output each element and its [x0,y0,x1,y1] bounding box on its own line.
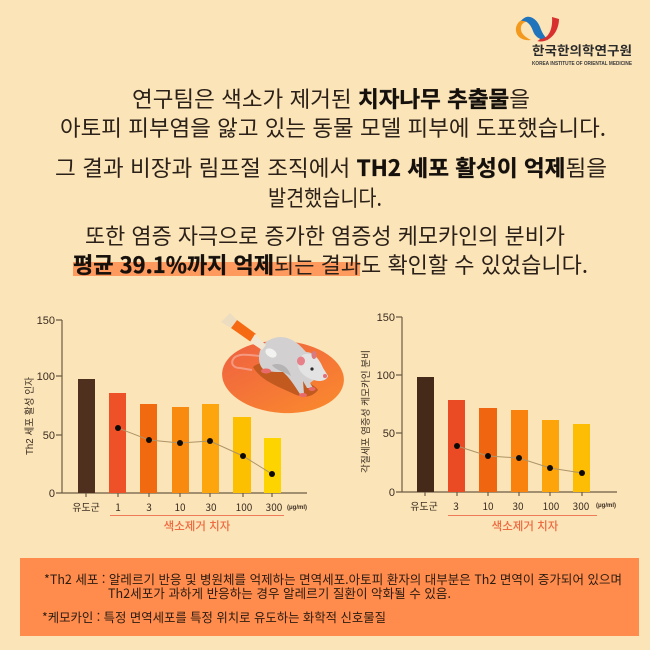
main text block: 또한 염증 자극으로 증가한 염증성 케모카인의 분비가 [85,219,565,251]
illustration: mouse with ointment on orange disc [220,313,346,417]
x axis labels: (μg/ml) [287,505,307,511]
main text block: 그 결과 비장과 림프절 조직에서 TH2 세포 활성이 억제됨을 [55,151,607,183]
x axis labels [410,498,616,513]
y axis ticks and labels: 100 [377,370,395,382]
main text block: 아토피 피부염을 앓고 있는 동물 모델 피부에 도포했습니다. [60,111,606,143]
x axis labels: 10 [174,499,186,514]
logo: Korea Institute of Oriental Medicine: 한국한의학연구원 [532,43,632,58]
footnote panel [20,558,639,636]
x axis labels: 3 [453,498,459,513]
footnote: Th2 cell: *Th2 세포 : 알레르기 반응 및 병원체를 억제하는 면역세포.아토피 환자의 대부분은 Th2 면역이 증가되어 있으며 [44,569,622,588]
bars [78,379,281,493]
main text block [55,82,607,280]
y axis ticks and labels: 0 [49,488,55,500]
footnote: chemokine: *케모카인 : 특정 면역세포를 특정 위치로 유도하는 화학적 신호물질 [42,607,386,626]
highlight behind key result [73,262,360,276]
x axis labels: 유도군 [410,498,438,513]
logo: Korea Institute of Oriental Medicine [516,17,633,67]
x axis labels [72,499,307,514]
y axis ticks and labels [37,315,307,500]
x axis labels: 10 [482,498,494,513]
main text block: 발견했습니다. [268,181,382,213]
x axis group label: 색소제거 치자 [492,518,559,534]
footnote: Th2 cell [44,569,622,602]
x axis labels: 100 [543,498,560,513]
chart: keratinocyte inflammatory chemokine secretion [360,312,617,534]
y axis ticks and labels: 100 [37,371,55,383]
x axis group label: 색소제거 치자 [164,518,231,534]
bars [417,377,590,492]
y axis title: 각질세포 염증성 케모카인 분비 [360,350,372,473]
main text block: 평균 39.1%까지 억제되는 결과도 확인할 수 있었습니다. [73,248,588,280]
x axis labels: 3 [146,499,152,514]
y axis ticks and labels: 0 [389,487,395,499]
y axis ticks and labels: 50 [43,430,55,442]
logo: Korea Institute of Oriental Medicine: KOREA INSTITUTE OF ORIENTAL MEDICINE [532,61,633,67]
y axis ticks and labels [377,312,617,499]
x axis labels: 1 [115,499,121,514]
x axis labels: (μg/ml) [596,503,616,509]
x axis labels: 100 [236,499,253,514]
y axis ticks and labels: 50 [383,428,395,440]
x axis labels: 300 [573,498,590,513]
x axis labels: 유도군 [72,499,100,514]
chart: Th2 cell activity factor [23,315,307,534]
x axis labels: 30 [205,499,217,514]
x axis labels: 30 [512,498,524,513]
x axis labels: 300 [266,499,283,514]
trend line with dots [454,443,585,476]
footnote: Th2 cell: Th2세포가 과하게 반응하는 경우 알레르기 질환이 악화될 수 있음. [108,583,451,602]
trend line with dots [115,425,275,477]
y axis ticks and labels: 150 [377,312,395,324]
main text block: 연구팀은 색소가 제거된 치자나무 추출물을 [132,82,530,114]
y axis ticks and labels: 150 [37,315,55,327]
y axis title: Th2 세포 활성 인자 [23,377,36,455]
